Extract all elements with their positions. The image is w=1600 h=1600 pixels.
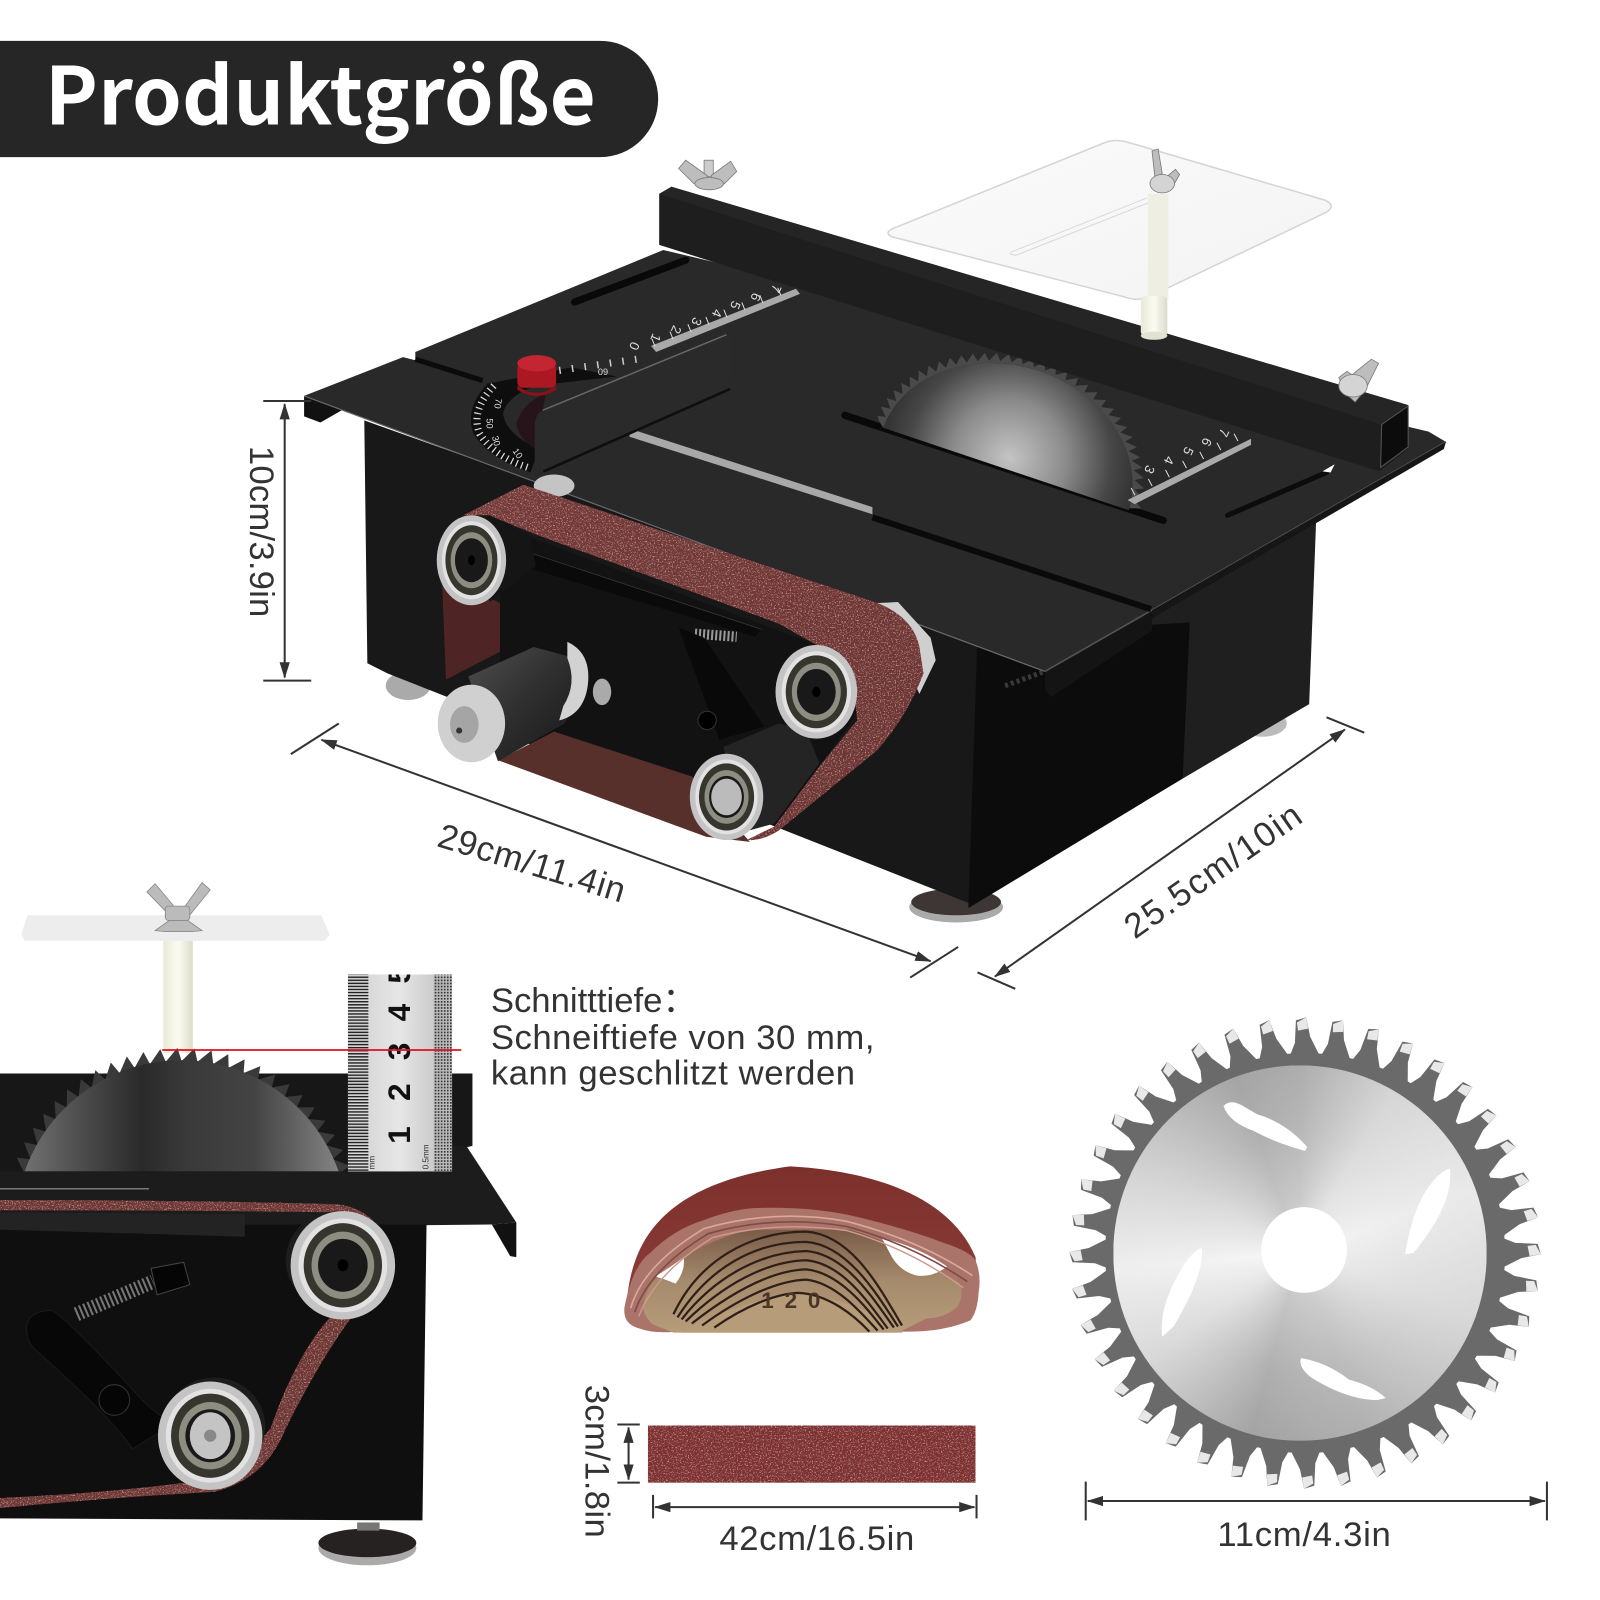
red knob — [517, 355, 556, 396]
miter block — [535, 335, 732, 470]
cutting depth text: Schnitttiefe： — [491, 982, 697, 1020]
steel ruler: 1 — [381, 1126, 417, 1144]
dimension: depth 25.5cm — [978, 717, 1364, 989]
foot side — [318, 1522, 416, 1565]
lower roller side — [158, 1378, 265, 1490]
dimension: belt length 42cm: 42cm/16.5in — [719, 1520, 914, 1558]
side bracket — [500, 536, 857, 827]
scale ruler back: 0 — [626, 340, 643, 352]
roller cylinders — [469, 515, 819, 832]
wing nuts — [679, 149, 1379, 402]
stacked belt edges — [673, 1232, 902, 1332]
post — [163, 941, 193, 1053]
cutting depth text: Schneiftiefe von 30 mm, — [491, 1019, 874, 1057]
wing nut side — [147, 883, 210, 932]
table side — [0, 1146, 516, 1230]
protractor — [471, 359, 637, 472]
acrylic plate — [888, 141, 1331, 340]
rollers — [437, 515, 857, 840]
blade teeth — [1069, 1017, 1541, 1489]
bracket side — [0, 1212, 245, 1237]
dimension: belt length 42cm — [653, 1495, 977, 1558]
white gaps — [655, 1238, 947, 1284]
steel ruler: mm — [367, 1156, 376, 1169]
scale ruler back: 3 — [688, 315, 705, 328]
sanding belt — [463, 485, 923, 840]
scale ruler front: 7 — [1216, 426, 1232, 439]
outer belt back — [627, 1166, 979, 1306]
scale ruler back — [626, 283, 800, 352]
sanding belt lower band — [498, 732, 750, 842]
steel ruler: 4 — [381, 1003, 417, 1021]
small saw blade on table — [878, 353, 1144, 510]
belt interior — [643, 1230, 962, 1333]
steel ruler: 3 — [381, 1043, 417, 1060]
arm and spring — [27, 1262, 190, 1449]
steel ruler: 0.5mm — [422, 1144, 431, 1169]
protractor: 70 — [492, 398, 504, 409]
acrylic plate side — [21, 915, 330, 941]
scale ruler back: 4 — [709, 307, 725, 320]
protractor: 50 — [485, 418, 495, 429]
knurled knob — [438, 642, 588, 762]
sanding belts stack — [624, 1166, 980, 1333]
steel ruler: 2 — [381, 1083, 417, 1101]
bottom tan — [682, 1293, 903, 1333]
front body — [364, 420, 980, 904]
blade side — [17, 1048, 348, 1172]
dimension: width 29cm: 29cm/11.4in — [433, 817, 630, 910]
protractor: 60 — [598, 366, 608, 376]
table lip side — [492, 1222, 516, 1257]
blade disc — [1113, 1065, 1487, 1441]
scale ruler back: 6 — [747, 291, 764, 303]
steel ruler: 5 — [381, 966, 417, 984]
protractor: 30 — [490, 435, 502, 447]
large saw blade — [1069, 1017, 1541, 1489]
scale ruler front: 4 — [1160, 454, 1177, 467]
grit number: 120 — [761, 1288, 820, 1313]
steel ruler — [348, 966, 452, 1171]
spring and arm — [593, 628, 764, 740]
dimension: height 10cm — [242, 401, 311, 681]
red depth line — [162, 1049, 461, 1051]
body side — [0, 1224, 427, 1520]
dimension: blade diameter 11cm: 11cm/4.3in — [1217, 1516, 1391, 1554]
dimension: belt width 3cm: 3cm/1.8in — [578, 1385, 616, 1538]
scale ruler back: 2 — [668, 323, 685, 336]
scale ruler back: 1 — [647, 331, 664, 344]
main product: table saw with belt sander — [304, 141, 1446, 922]
right side wall — [1138, 515, 1316, 779]
protractor: 10 — [511, 446, 525, 461]
rear roller edge — [534, 474, 936, 694]
fence side — [0, 1073, 472, 1173]
dimension: blade diameter 11cm — [1086, 1482, 1547, 1554]
blade hole — [1261, 1207, 1347, 1293]
scale ruler front: 5 — [1180, 445, 1197, 458]
fence — [659, 187, 1408, 471]
scale ruler back: 5 — [727, 299, 744, 311]
scale ruler front: 3 — [1141, 463, 1158, 476]
opening — [968, 622, 1190, 908]
title: Produktgröße — [45, 32, 596, 147]
cutting depth text — [491, 982, 874, 1093]
scale ruler front — [1128, 426, 1251, 504]
dimension: belt width 3cm — [578, 1385, 640, 1538]
dimension: height 10cm: 10cm/3.9in — [242, 446, 280, 617]
cutting depth text: kann geschlitzt werden — [491, 1055, 855, 1093]
dimension: depth 25.5cm: 25.5cm/10in — [1117, 796, 1309, 946]
table lips — [304, 396, 1446, 697]
table top — [304, 250, 1446, 671]
blade slots — [1162, 1102, 1450, 1400]
dimension: width 29cm — [291, 723, 958, 978]
belt rim — [624, 1208, 980, 1332]
feet — [386, 671, 1287, 922]
scale ruler front: 6 — [1198, 435, 1215, 448]
belt side — [0, 1200, 393, 1508]
sanding belt side view — [648, 1426, 976, 1483]
upper roller side — [286, 1211, 395, 1319]
rim layers — [631, 1216, 972, 1316]
sanding belt back section — [442, 577, 509, 680]
scale ruler back: 7 — [768, 283, 785, 295]
table slots and rail — [415, 260, 1335, 609]
table rail line — [0, 1188, 149, 1190]
cutting depth detail view — [0, 883, 516, 1565]
